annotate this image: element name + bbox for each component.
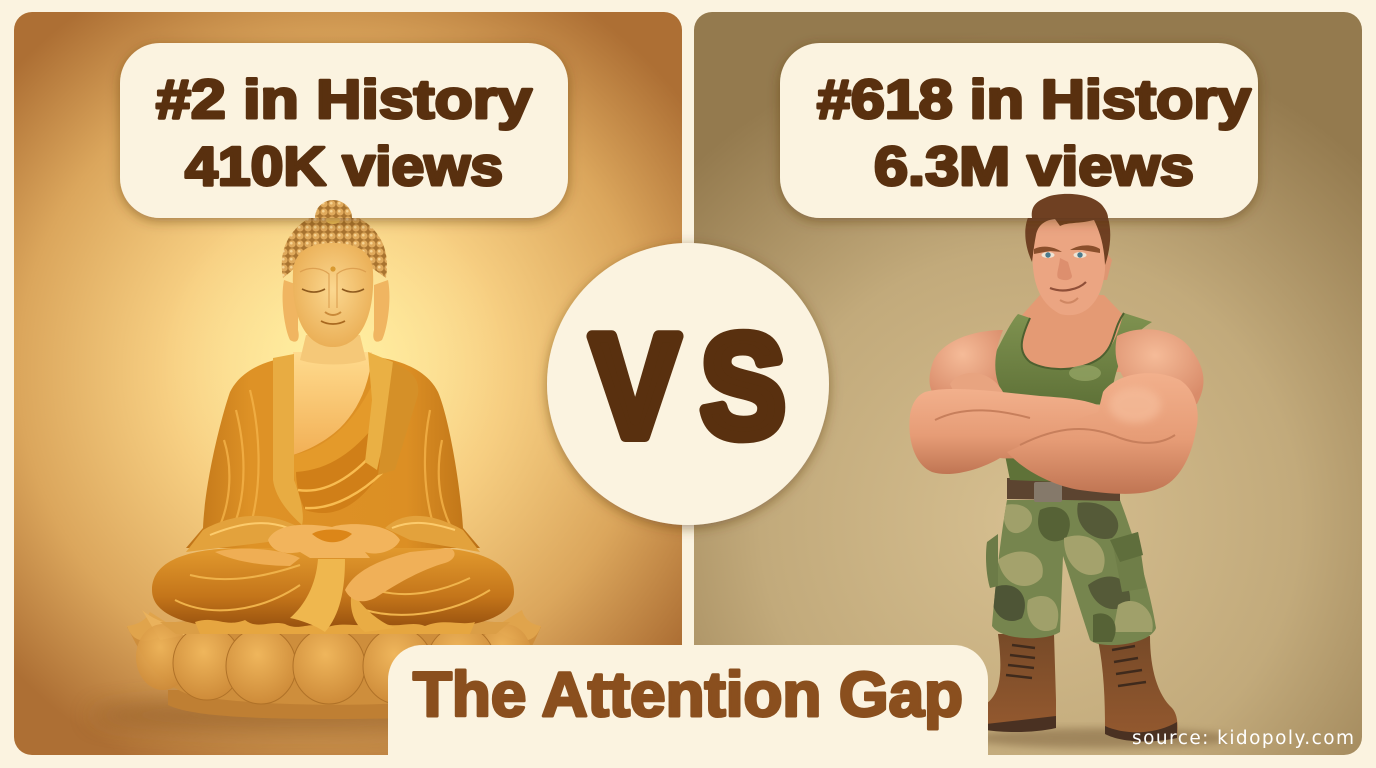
panel: left Buddha xyxy=(14,12,682,755)
sash folds xyxy=(293,385,372,496)
central drape xyxy=(290,559,345,632)
illustration: muscular soldier xyxy=(909,193,1203,741)
source credit: source: kidopoly.com xyxy=(1132,728,1354,749)
smile xyxy=(1050,282,1086,290)
crossed legs xyxy=(152,548,514,634)
head xyxy=(1025,193,1112,315)
left views: 410K views xyxy=(185,135,503,197)
title text: The Attention Gap xyxy=(413,660,963,730)
left boot xyxy=(986,634,1056,730)
left rank heading: #2 in History xyxy=(156,68,532,130)
brows xyxy=(1034,245,1100,254)
ears xyxy=(283,280,299,342)
viewer-right arm xyxy=(1007,329,1203,494)
hair xyxy=(1025,193,1110,265)
bare chest xyxy=(293,352,372,455)
robed torso xyxy=(186,352,480,552)
floor shadow under lotus xyxy=(90,699,510,731)
Buddha top-knot overlap on callout xyxy=(315,200,352,218)
boot laces xyxy=(1006,645,1146,686)
lower tank xyxy=(1002,440,1060,482)
soldier head overlap on callout xyxy=(1032,194,1108,218)
soles xyxy=(986,716,1177,741)
nose xyxy=(1057,258,1072,280)
right rank heading: #618 in History xyxy=(817,68,1251,130)
tank top xyxy=(985,313,1152,405)
right ear xyxy=(373,280,389,342)
right views: 6.3M views xyxy=(874,135,1194,197)
VS label xyxy=(591,305,785,467)
camo trousers xyxy=(986,500,1156,645)
belt xyxy=(1007,478,1120,502)
callout: right stats xyxy=(780,43,1258,218)
curled hair xyxy=(282,200,387,278)
VS label: S xyxy=(701,305,785,467)
warm glow behind Buddha xyxy=(163,190,503,530)
robe hem xyxy=(195,620,475,634)
VS label: V xyxy=(591,305,679,467)
lotus throne xyxy=(127,610,541,719)
ground shadow xyxy=(970,728,1230,748)
hands and foot xyxy=(215,524,455,601)
illustration: meditating Buddha xyxy=(127,200,541,719)
callout: left stats xyxy=(120,43,568,218)
eyes xyxy=(1042,252,1054,258)
neck and chest xyxy=(1015,295,1128,372)
right boot xyxy=(1098,636,1177,740)
VS badge xyxy=(547,243,829,525)
neck xyxy=(300,335,366,364)
panel: right soldier xyxy=(694,12,1362,755)
face xyxy=(293,216,373,347)
title banner xyxy=(388,645,988,755)
viewer-left arm and hand xyxy=(909,330,1110,474)
